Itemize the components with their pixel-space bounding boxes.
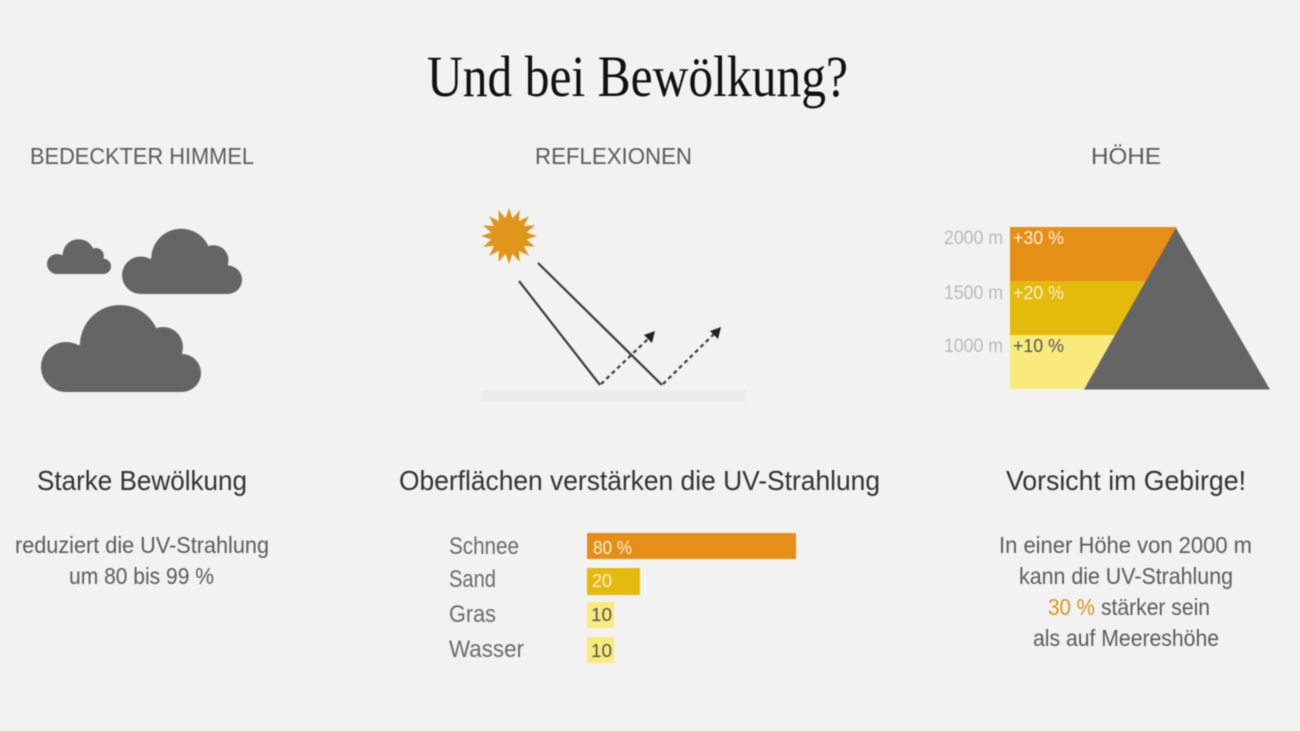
band: 1500 m: 1500 m <box>944 283 1003 304</box>
ground surface <box>481 390 746 401</box>
bar: Wasser: 10 <box>591 641 612 661</box>
band: 2000 m <box>944 227 1177 281</box>
icon: medium cloud <box>122 229 242 294</box>
band: 2000 m: 2000 m <box>944 228 1003 249</box>
bar: Schnee <box>449 533 796 560</box>
subheading: Starke Bewölkung: Starke Bewölkung <box>37 465 247 496</box>
arrow: reflected ray 2 <box>663 327 721 384</box>
bar: Sand: 20 <box>592 571 612 591</box>
icon: large cloud <box>41 305 201 392</box>
text block: altitude note: kann die UV-Strahlung <box>1019 563 1233 589</box>
text block: cloud reduction: um 80 bis 99 % <box>69 563 214 589</box>
subheading: Oberflächen: Oberflächen verstärken die UV-Strahlung <box>399 465 880 496</box>
text block: altitude note: als auf Meereshöhe <box>1033 625 1219 651</box>
panel: Höhe <box>944 143 1270 651</box>
bar: Gras: Gras <box>449 601 496 628</box>
band: 1000 m: 1000 m <box>944 336 1003 357</box>
text block: altitude note: stärker sein <box>1101 594 1210 620</box>
icon: sun <box>481 208 537 264</box>
bar: Wasser: Wasser <box>449 636 524 663</box>
text block: cloud reduction <box>15 532 269 589</box>
arrow: reflected ray 1 <box>601 331 655 384</box>
panel: bedeckter Himmel <box>15 143 269 589</box>
heading: bedeckter Himmel: BEDECKTER HIMMEL <box>30 143 254 169</box>
icon: clouds <box>41 229 242 392</box>
band: 1000 m: +10 % <box>1013 336 1064 356</box>
text block: altitude note: In einer Höhe von 2000 m <box>999 532 1252 558</box>
band: 1500 m <box>944 281 1146 335</box>
chart: altitude bands <box>944 227 1270 390</box>
heading: Höhe: HÖHE <box>1091 143 1161 169</box>
title: Und bei Bewölkung? <box>427 44 848 109</box>
text block: altitude note <box>999 532 1252 651</box>
text block: cloud reduction: reduziert die UV-Strahlung <box>15 532 269 558</box>
bar: Schnee: Schnee <box>449 533 519 560</box>
panel: Reflexionen <box>399 143 880 663</box>
heading: Reflexionen: REFLEXIONEN <box>535 143 692 169</box>
bar: Sand <box>449 566 640 595</box>
bar: Schnee: 80 % <box>593 538 632 558</box>
bar: Gras <box>449 601 614 628</box>
subheading: Vorsicht im Gebirge: Vorsicht im Gebirge! <box>1006 465 1246 496</box>
bar: Wasser <box>449 636 614 663</box>
bar: Sand: Sand <box>449 566 496 593</box>
band: 2000 m: +30 % <box>1013 228 1064 248</box>
bar chart: surface reflection <box>449 533 796 663</box>
bar: Gras: 10 <box>591 605 612 625</box>
arrow: incoming rays <box>519 263 662 385</box>
icon: mountain <box>1084 228 1270 390</box>
band: 1500 m: +20 % <box>1013 283 1064 303</box>
text block: altitude note: 30 % <box>1048 594 1095 620</box>
icon: small cloud <box>47 239 111 274</box>
band: 1000 m <box>944 335 1115 389</box>
